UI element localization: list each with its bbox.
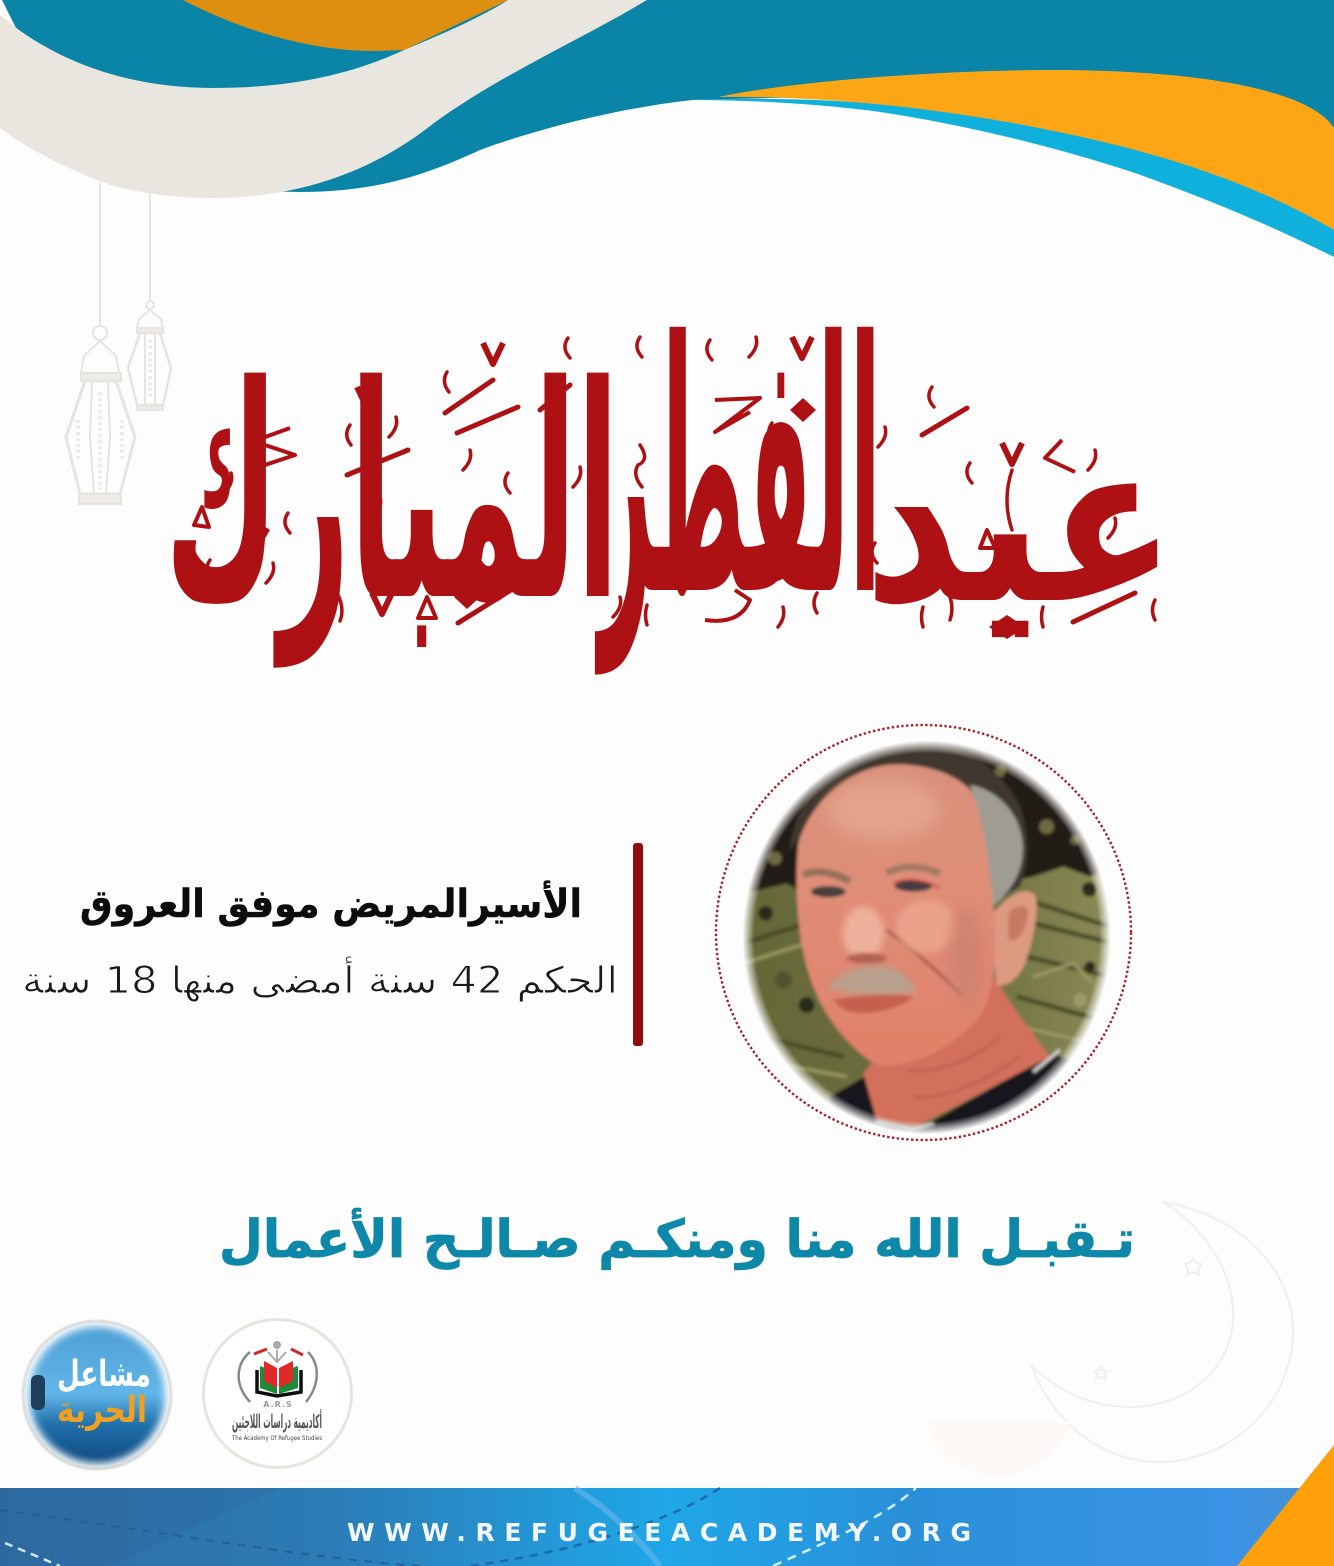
vertical divider xyxy=(633,843,643,1046)
face xyxy=(797,764,995,1065)
orange corner xyxy=(1237,1445,1334,1566)
calligraphy ornaments: v marks xyxy=(357,337,1022,614)
logo text: english name: The Academy Of Refugee Studies xyxy=(231,1435,322,1442)
greeting: تـقبـل الله منا ومنكـم صـالـح الأعمال xyxy=(219,1207,1135,1270)
title word: mubarak: المبارك xyxy=(165,325,619,668)
calligraphy ornaments: diamonds xyxy=(243,398,1025,639)
website address: WWW.REFUGEEACADEMY.ORG xyxy=(347,1518,971,1547)
logo text: hurriya: الحرية xyxy=(57,1390,147,1431)
hair xyxy=(790,741,1027,907)
calligraphy ornaments: long strokes xyxy=(347,380,1135,623)
logo text: ARS: A.R.S xyxy=(263,1400,293,1409)
ear xyxy=(990,891,1037,985)
sentence details: الحكم 42 سنة أمضى منها 18 سنة xyxy=(22,956,618,1002)
crescent moon xyxy=(1032,1202,1293,1462)
calligraphy ornaments: small loops xyxy=(194,398,1075,621)
logo text: mashael: مشاعل xyxy=(57,1354,151,1395)
facial shading xyxy=(887,930,963,997)
faint pink semicircle xyxy=(927,1422,1070,1475)
neck xyxy=(863,977,1050,1127)
shirt xyxy=(830,1054,1068,1133)
brows and eyes xyxy=(803,872,850,882)
portrait photo xyxy=(743,741,1110,1134)
calligraphy ornaments: ticks xyxy=(207,337,1155,627)
icon: hanging lanterns xyxy=(66,182,171,504)
title word: fitr: الفطر xyxy=(595,269,881,675)
footer bar xyxy=(0,1445,1334,1566)
header waves xyxy=(0,0,1334,257)
moustache and mouth xyxy=(827,966,917,995)
prisoner name: الأسيرالمريض موفق العروق xyxy=(80,879,582,927)
logo: academy of refugee studies xyxy=(204,1320,352,1468)
title word: eid: عيد xyxy=(864,393,1176,653)
title calligraphy xyxy=(165,269,1176,675)
logo: academy of refugee studies: أكاديمية دراسات اللاجئين xyxy=(232,1409,322,1433)
logo: mashael al-hurriya xyxy=(23,1321,171,1469)
portrait frame xyxy=(716,725,1131,1140)
portrait vignette xyxy=(741,739,1112,1135)
